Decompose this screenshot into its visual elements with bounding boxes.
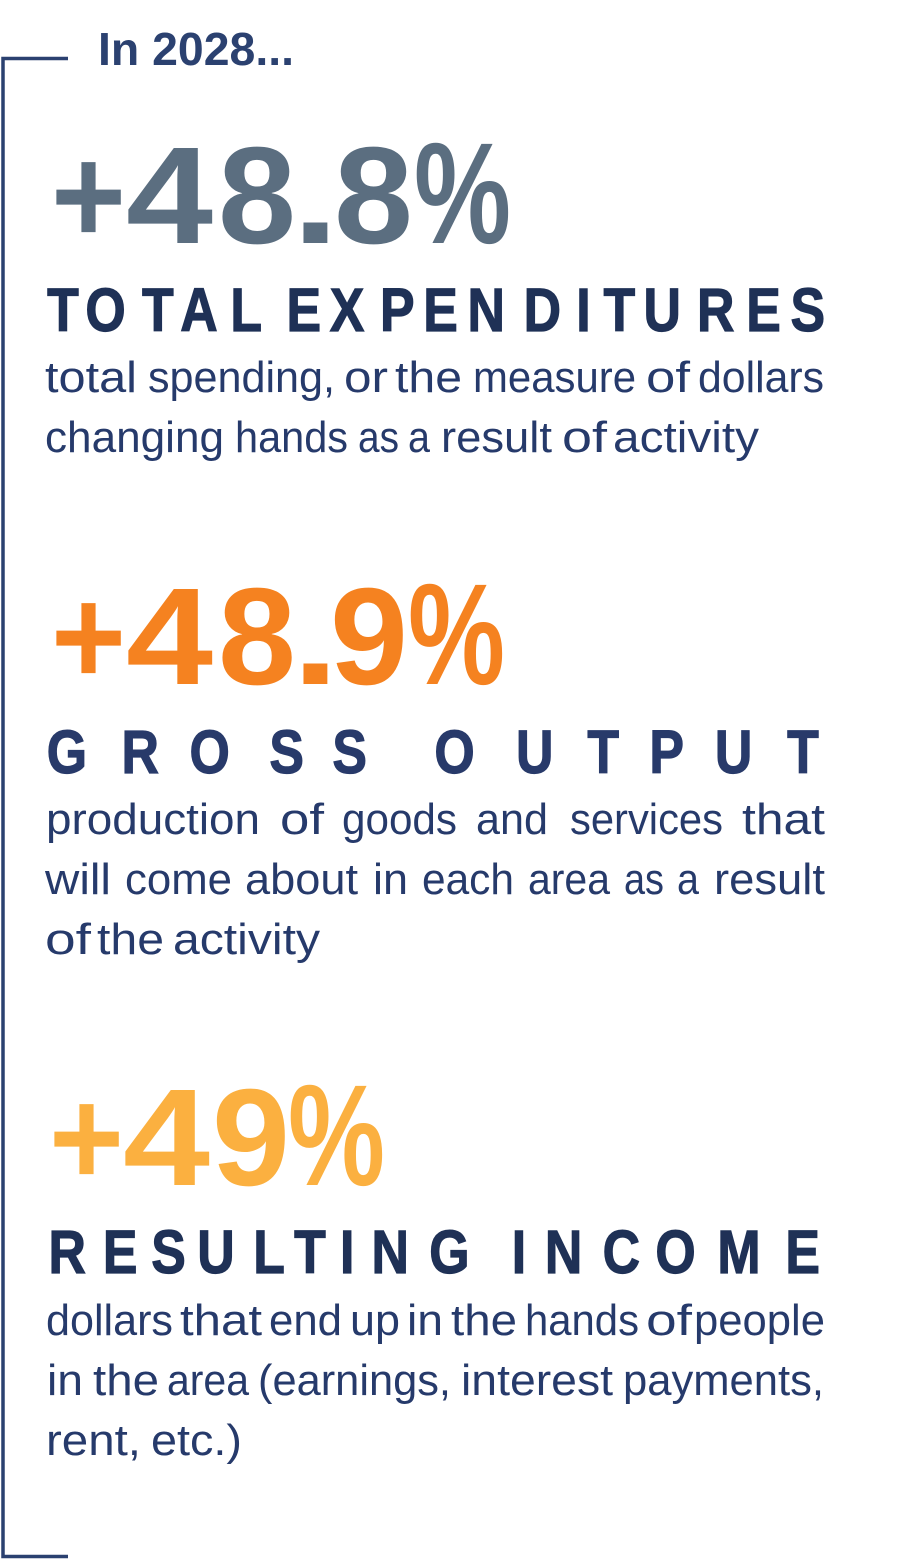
stat: +49%: 9 bbox=[212, 1061, 290, 1215]
description: gross output: production bbox=[46, 795, 260, 844]
description: gross output: and bbox=[476, 795, 548, 844]
description: total expenditures: spending, bbox=[148, 353, 335, 402]
description: resulting income: dollars bbox=[46, 1296, 173, 1345]
stat: +49%: % bbox=[288, 1055, 385, 1216]
description: total expenditures: the bbox=[395, 353, 462, 402]
description: total expenditures: result bbox=[441, 413, 552, 462]
description: gross output: in bbox=[373, 855, 408, 904]
title: In 2028... bbox=[98, 23, 294, 75]
description: resulting income: people bbox=[694, 1296, 825, 1345]
description: total expenditures: activity bbox=[613, 413, 759, 462]
description: gross output: a bbox=[677, 855, 699, 904]
description: total expenditures: or bbox=[344, 353, 388, 402]
description: gross output: the bbox=[97, 915, 164, 964]
description: resulting income: in bbox=[47, 1356, 83, 1405]
description: total expenditures: of bbox=[562, 413, 608, 462]
description: total expenditures bbox=[45, 353, 824, 462]
stat: +48.9%: 4 bbox=[126, 560, 213, 714]
description: resulting income: interest bbox=[461, 1356, 613, 1405]
description: gross output: services bbox=[570, 795, 723, 844]
description: total expenditures: changing bbox=[45, 413, 224, 462]
description: resulting income: (earnings, bbox=[258, 1356, 451, 1405]
description: total expenditures: a bbox=[408, 413, 430, 462]
panel: gross output bbox=[44, 554, 825, 964]
description: total expenditures: dollars bbox=[698, 353, 824, 402]
description: gross output: that bbox=[742, 795, 825, 844]
heading: total expenditures: TOTAL EXPENDITURES bbox=[47, 276, 825, 344]
description: resulting income: of bbox=[646, 1296, 693, 1345]
stat: +48.8%: 8 bbox=[334, 119, 413, 273]
description: resulting income: in bbox=[407, 1296, 443, 1345]
stat: +48.8%: 8 bbox=[218, 119, 296, 273]
stat: +48.9%: 8 bbox=[218, 560, 296, 714]
stat: +48.8%: 4 bbox=[126, 119, 213, 273]
stat: +48.8%: % bbox=[414, 113, 511, 274]
description: gross output: goods bbox=[342, 795, 457, 844]
panel: resulting income bbox=[46, 1055, 825, 1465]
panel: total expenditures bbox=[45, 113, 825, 462]
description: gross output bbox=[44, 795, 825, 964]
description: resulting income: rent, bbox=[46, 1416, 141, 1465]
description: gross output: of bbox=[280, 795, 325, 844]
stat: +48.9%: . bbox=[292, 560, 339, 714]
description: resulting income: etc.) bbox=[151, 1416, 242, 1465]
description: resulting income bbox=[46, 1296, 825, 1465]
description: gross output: come bbox=[125, 855, 232, 904]
description: resulting income: that bbox=[180, 1296, 262, 1345]
description: resulting income: payments, bbox=[623, 1356, 824, 1405]
stat: +48.9%: % bbox=[408, 554, 505, 715]
description: resulting income: area bbox=[167, 1356, 249, 1405]
description: total expenditures: as bbox=[358, 413, 399, 462]
description: gross output: of bbox=[45, 915, 92, 964]
description: resulting income: end bbox=[269, 1296, 342, 1345]
heading: resulting income: RESULTING INCOME bbox=[48, 1218, 820, 1286]
description: gross output: area bbox=[528, 855, 610, 904]
description: gross output: as bbox=[624, 855, 664, 904]
stat: +49%: 4 bbox=[123, 1061, 210, 1215]
description: resulting income: the bbox=[93, 1356, 159, 1405]
description: resulting income: the bbox=[451, 1296, 517, 1345]
description: total expenditures: total bbox=[45, 353, 137, 402]
description: resulting income: hands bbox=[525, 1296, 639, 1345]
description: gross output: about bbox=[245, 855, 358, 904]
stat: +48.9%: + bbox=[51, 560, 126, 714]
description: gross output: each bbox=[422, 855, 514, 904]
stat: +49%: + bbox=[49, 1061, 124, 1215]
description: gross output: result bbox=[714, 855, 825, 904]
bracket bbox=[3, 58, 68, 1556]
stat: +48.8%: . bbox=[292, 119, 339, 273]
description: total expenditures: of bbox=[646, 353, 691, 402]
stat: +48.9%: 9 bbox=[330, 560, 408, 714]
description: resulting income: up bbox=[350, 1296, 400, 1345]
description: gross output: activity bbox=[173, 915, 320, 964]
heading: gross output: GROSS OUTPUT bbox=[47, 718, 819, 786]
description: gross output: will bbox=[44, 855, 111, 904]
description: total expenditures: hands bbox=[235, 413, 348, 462]
description: total expenditures: measure bbox=[473, 353, 636, 402]
stat: +48.8%: + bbox=[51, 119, 126, 273]
